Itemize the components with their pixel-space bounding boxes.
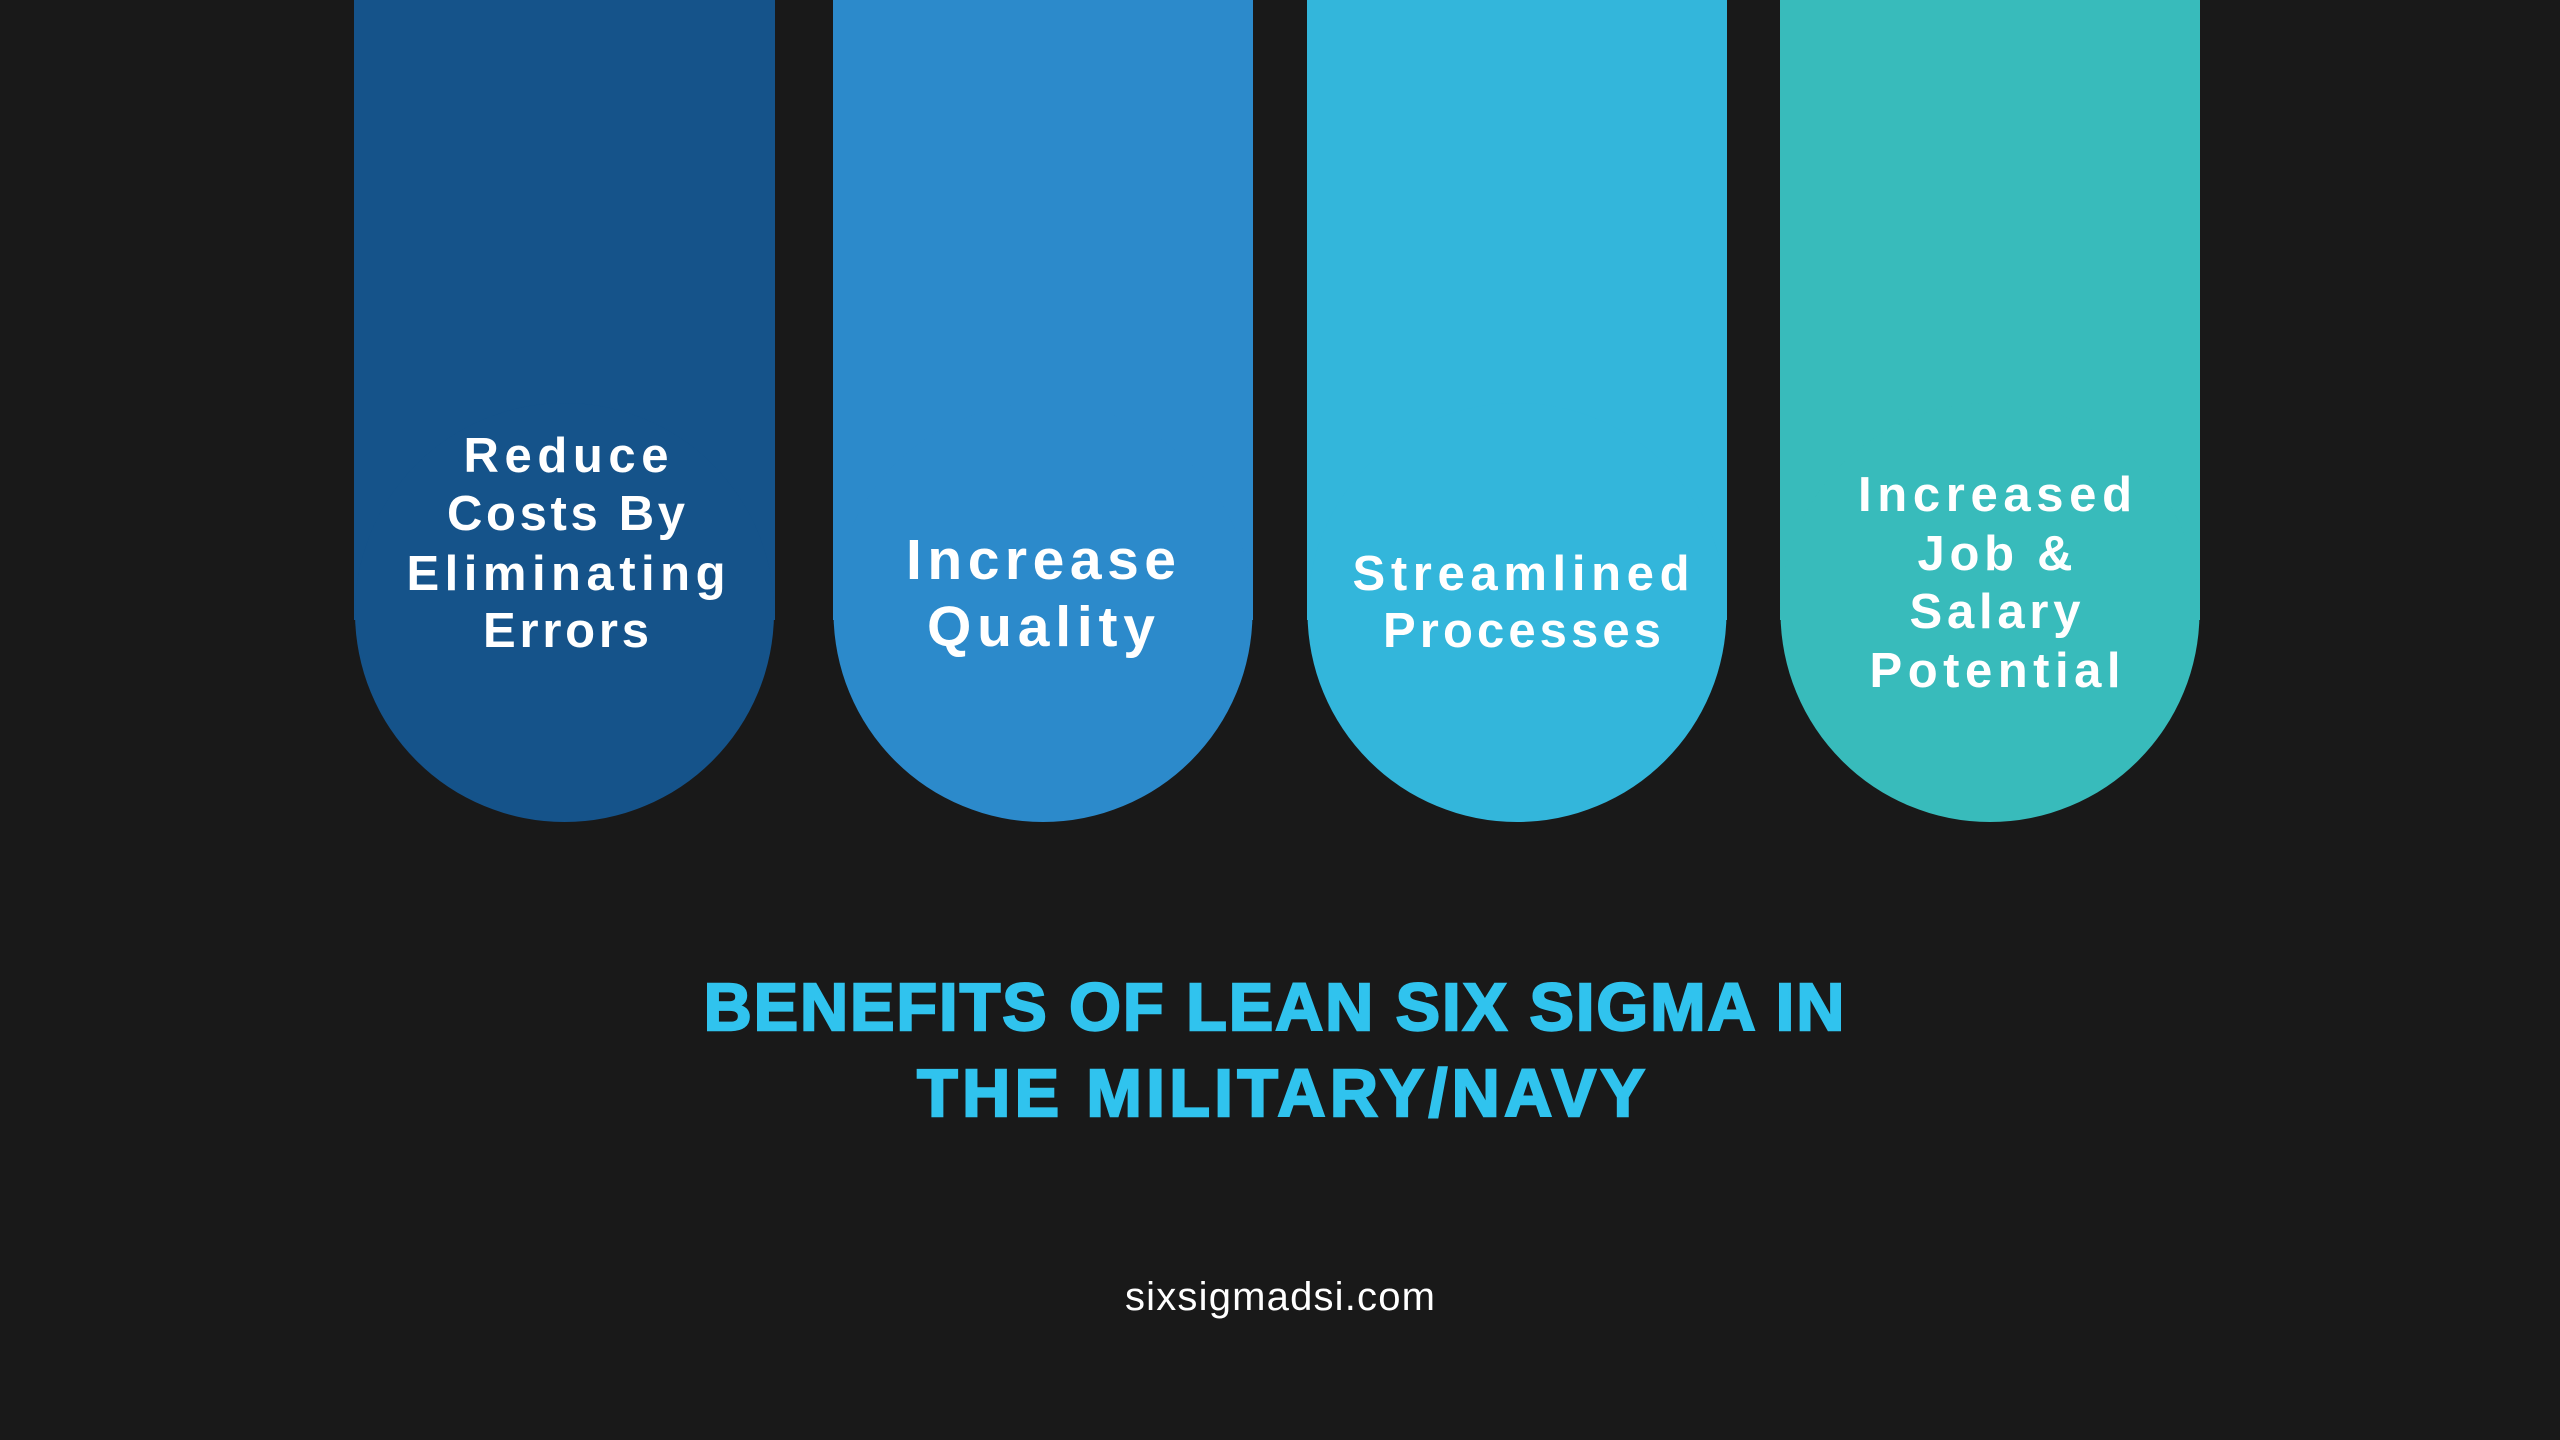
text: increased job and salary potential: Potential: [1870, 644, 2120, 698]
text: increased job and salary potential: [1858, 468, 2132, 698]
text: streamlined processes: [1352, 547, 1690, 658]
panel: increased job and salary pill: [1780, 0, 2200, 822]
panel: reduce costs pill: [354, 0, 775, 822]
text: streamlined processes: Processes: [1383, 604, 1661, 658]
text: increase quality: [906, 528, 1176, 659]
text: reduce costs by eliminating errors: Eliminating: [406, 547, 726, 601]
panel: increase quality pill: [833, 0, 1253, 822]
text: increase quality: Quality: [927, 595, 1155, 659]
text: reduce costs by eliminating errors: Reduce: [464, 429, 668, 483]
text: increase quality: Increase: [906, 528, 1176, 592]
text: reduce costs by eliminating errors: [406, 429, 726, 658]
text: increased job and salary potential: Increased: [1858, 468, 2132, 522]
text: increased job and salary potential: Job &: [1918, 527, 2072, 581]
title: [704, 971, 1844, 1131]
text: reduce costs by eliminating errors: Errors: [483, 604, 649, 658]
title: THE MILITARY/NAVY: [917, 1057, 1645, 1131]
text: increased job and salary potential: Salary: [1910, 585, 2080, 639]
title: BENEFITS OF LEAN SIX SIGMA IN: [704, 971, 1844, 1045]
text: streamlined processes: Streamlined: [1352, 547, 1690, 601]
text: reduce costs by eliminating errors: Costs By: [447, 487, 685, 541]
website footer: sixsigmadsi.com: [1125, 1275, 1435, 1319]
panel: streamlined processes pill: [1307, 0, 1727, 822]
